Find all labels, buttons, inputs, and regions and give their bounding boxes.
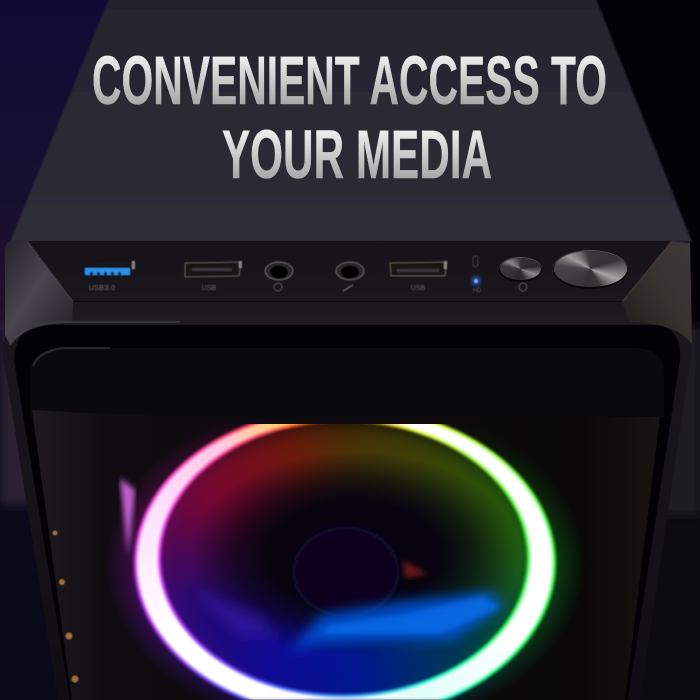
frame inner channel bbox=[14, 325, 680, 700]
fan LED ring bbox=[132, 424, 558, 700]
port: headphone jack bbox=[265, 262, 293, 291]
front I/O panel bbox=[5, 241, 692, 345]
lip highlight bbox=[33, 348, 110, 366]
reset button bbox=[500, 258, 541, 280]
title line 2: YOUR MEDIA bbox=[222, 116, 492, 193]
fan interior colour wash bbox=[160, 424, 528, 696]
port: USB 3.0: USB3.0 bbox=[89, 285, 115, 292]
port: USB right: USB bbox=[411, 285, 426, 292]
port: USB right bbox=[390, 261, 447, 292]
case top surface bbox=[10, 0, 692, 242]
RGB fan bbox=[110, 424, 580, 700]
background lower left bbox=[0, 330, 70, 700]
fan details: hub and blade reflections bbox=[118, 476, 510, 654]
fan hub shadow bbox=[190, 452, 520, 657]
background right bbox=[570, 0, 700, 330]
sparkle dots on glass bbox=[52, 530, 78, 682]
left corner bevel bbox=[5, 241, 73, 345]
case body frame bbox=[2, 322, 692, 700]
background left bbox=[0, 0, 130, 330]
power icon bbox=[519, 283, 527, 291]
status LEDs: HD bbox=[473, 288, 482, 294]
port: microphone jack bbox=[336, 262, 364, 291]
ring white core bbox=[135, 424, 556, 700]
right corner bevel bbox=[622, 241, 692, 345]
port: USB 3.0 bbox=[81, 261, 135, 292]
glass window bbox=[32, 410, 660, 700]
port: USB left: USB bbox=[202, 285, 217, 292]
background lower right bbox=[630, 330, 700, 700]
power button bbox=[554, 251, 627, 287]
port: USB left bbox=[185, 261, 242, 292]
status LEDs bbox=[471, 256, 482, 294]
ring colour fringe bbox=[130, 400, 560, 700]
frame top highlight bbox=[10, 322, 180, 345]
fan outer glow bbox=[105, 424, 585, 700]
front lip bbox=[30, 348, 664, 417]
